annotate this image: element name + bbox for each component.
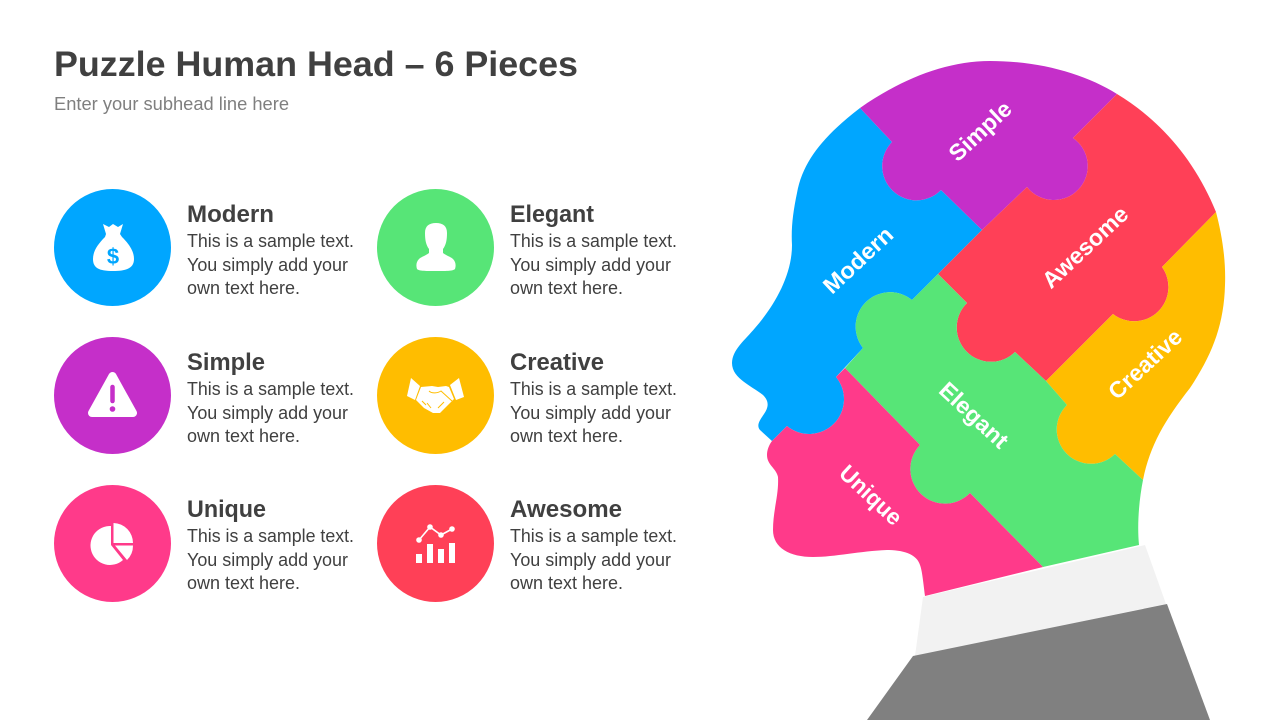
text: Creative description: This is a sample text. [510, 379, 677, 399]
heading: Awesome: Awesome [510, 496, 622, 523]
text: Awesome description: own text here. [510, 573, 623, 593]
text: Unique description [187, 526, 354, 593]
icon: warning triangle [54, 337, 171, 454]
text: Modern description: You simply add your [187, 255, 348, 275]
item: Modern [54, 189, 354, 306]
item: Unique [54, 485, 354, 602]
text: Awesome description [510, 526, 677, 593]
subhead: Enter your subhead line here [54, 93, 289, 114]
text: Elegant description: This is a sample text. [510, 231, 677, 251]
icon: person [377, 189, 494, 306]
text: Unique description: You simply add your [187, 550, 348, 570]
puzzle piece: Unique: Unique [834, 460, 908, 530]
item: Awesome [377, 485, 677, 602]
text: Awesome description: You simply add your [510, 550, 671, 570]
puzzle piece: Modern: Modern [818, 221, 898, 299]
heading: Elegant: Elegant [510, 201, 594, 228]
puzzle piece: Creative [1046, 212, 1225, 480]
text: Awesome description: This is a sample text. [510, 526, 677, 546]
icon: handshake [377, 337, 494, 454]
text: Elegant description: You simply add your [510, 255, 671, 275]
text: Elegant description [510, 231, 677, 298]
puzzle piece: Elegant [845, 274, 1143, 567]
text: Simple description: You simply add your [187, 403, 348, 423]
text: Modern description [187, 231, 354, 298]
suit jacket [867, 604, 1210, 720]
item: Creative [377, 337, 677, 454]
text: Unique description: own text here. [187, 573, 300, 593]
text: Simple description: own text here. [187, 426, 300, 446]
puzzle piece: Awesome [938, 94, 1216, 381]
icon: money bag [54, 189, 171, 306]
heading: Creative: Creative [510, 349, 604, 376]
text: Simple description [187, 379, 354, 446]
text: Creative description: own text here. [510, 426, 623, 446]
text: Unique description: This is a sample text. [187, 526, 354, 546]
puzzle piece: Simple: Simple [943, 96, 1017, 166]
heading: Simple: Simple [187, 349, 265, 376]
icon: money bag: $ [107, 244, 119, 269]
puzzle piece: Awesome: Awesome [1037, 201, 1133, 293]
puzzle piece: Modern [732, 108, 982, 441]
text: Creative description: You simply add your [510, 403, 671, 423]
puzzle piece: Unique [767, 368, 1043, 596]
text: Creative description [510, 379, 677, 446]
heading: Unique: Unique [187, 496, 266, 523]
text: Modern description: own text here. [187, 278, 300, 298]
puzzle piece: Simple [860, 61, 1117, 230]
text: Elegant description: own text here. [510, 278, 623, 298]
puzzle piece: Elegant: Elegant [934, 377, 1014, 454]
icon: bar and line chart [377, 485, 494, 602]
shirt collar [915, 545, 1166, 656]
icon: pie chart [54, 485, 171, 602]
puzzle head illustration [732, 61, 1225, 720]
puzzle piece: Creative: Creative [1103, 323, 1187, 405]
item: Simple [54, 337, 354, 454]
title: Puzzle Human Head – 6 Pieces [54, 45, 578, 84]
heading: Modern: Modern [187, 201, 274, 228]
text: Modern description: This is a sample text. [187, 231, 354, 251]
item: Elegant [377, 189, 677, 306]
text: Simple description: This is a sample text. [187, 379, 354, 399]
